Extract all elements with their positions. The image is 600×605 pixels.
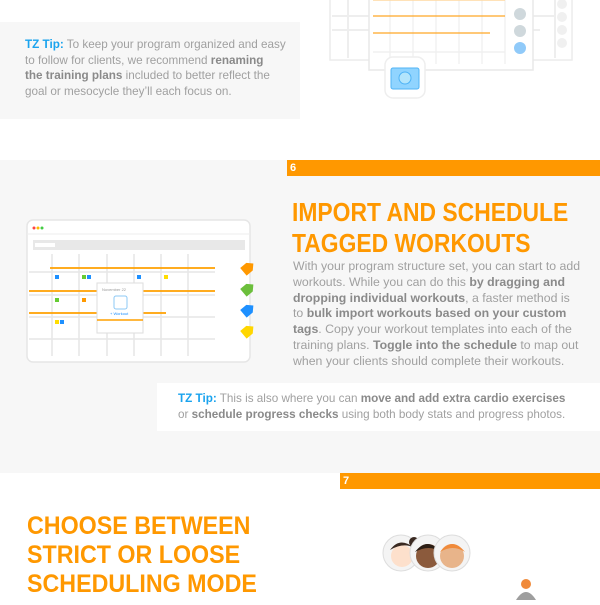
body text: section 6 xyxy=(293,259,580,368)
body text: section 6: when your clients should complete their workouts. xyxy=(293,354,564,368)
tip box: renaming: to follow for clients, we recommend renaming xyxy=(25,54,263,66)
body text: section 6: With your program structure set, you can start to add xyxy=(293,259,580,273)
step bar 7: 7 xyxy=(343,475,349,487)
illustration: top calendar with photo xyxy=(329,0,573,99)
heading: import and schedule xyxy=(292,197,568,258)
tip box: renaming: goal or mesocycle they’ll each focus on. xyxy=(25,84,232,98)
step bar 6 xyxy=(287,160,600,176)
body text: section 6: training plans. Toggle into the schedule to map out xyxy=(293,338,578,352)
section 6 background xyxy=(0,160,600,473)
tip box: cardio: or schedule progress checks using both body stats and progress photos. xyxy=(178,408,565,420)
heading: import and schedule: IMPORT AND SCHEDULE xyxy=(292,197,568,227)
tip box: cardio: TZ Tip: This is also where you can move and add extra cardio exercises xyxy=(178,392,565,405)
tip box: renaming xyxy=(0,22,300,119)
illustration: calendar with tags xyxy=(26,219,254,363)
body text: section 6: to bulk import workouts based on your custom xyxy=(293,306,566,320)
body text: section 6: workouts. While you can do this by dragging and xyxy=(293,275,565,289)
body text: section 6: tags. Copy your workout templates into each of the xyxy=(293,322,572,336)
illustration: client faces xyxy=(382,534,536,600)
illustration: calendar with tags: November 22 xyxy=(102,287,127,292)
heading: import and schedule: TAGGED WORKOUTS xyxy=(292,228,531,258)
heading: strict or loose xyxy=(27,512,257,598)
heading: strict or loose: STRICT OR LOOSE xyxy=(27,541,240,569)
heading: strict or loose: SCHEDULING MODE xyxy=(27,570,257,598)
tip box: renaming: TZ Tip: To keep your program organized and easy xyxy=(25,38,286,51)
body text: section 6: dropping individual workouts, a faster method is xyxy=(293,291,570,305)
tip box: cardio xyxy=(157,383,600,431)
tip box: renaming: the training plans included to better reflect the xyxy=(25,69,270,82)
step bar 7 xyxy=(340,473,600,489)
heading: strict or loose: CHOOSE BETWEEN xyxy=(27,512,250,540)
step bar 6: 6 xyxy=(290,162,296,174)
illustration: calendar with tags: + Workout xyxy=(110,311,129,316)
